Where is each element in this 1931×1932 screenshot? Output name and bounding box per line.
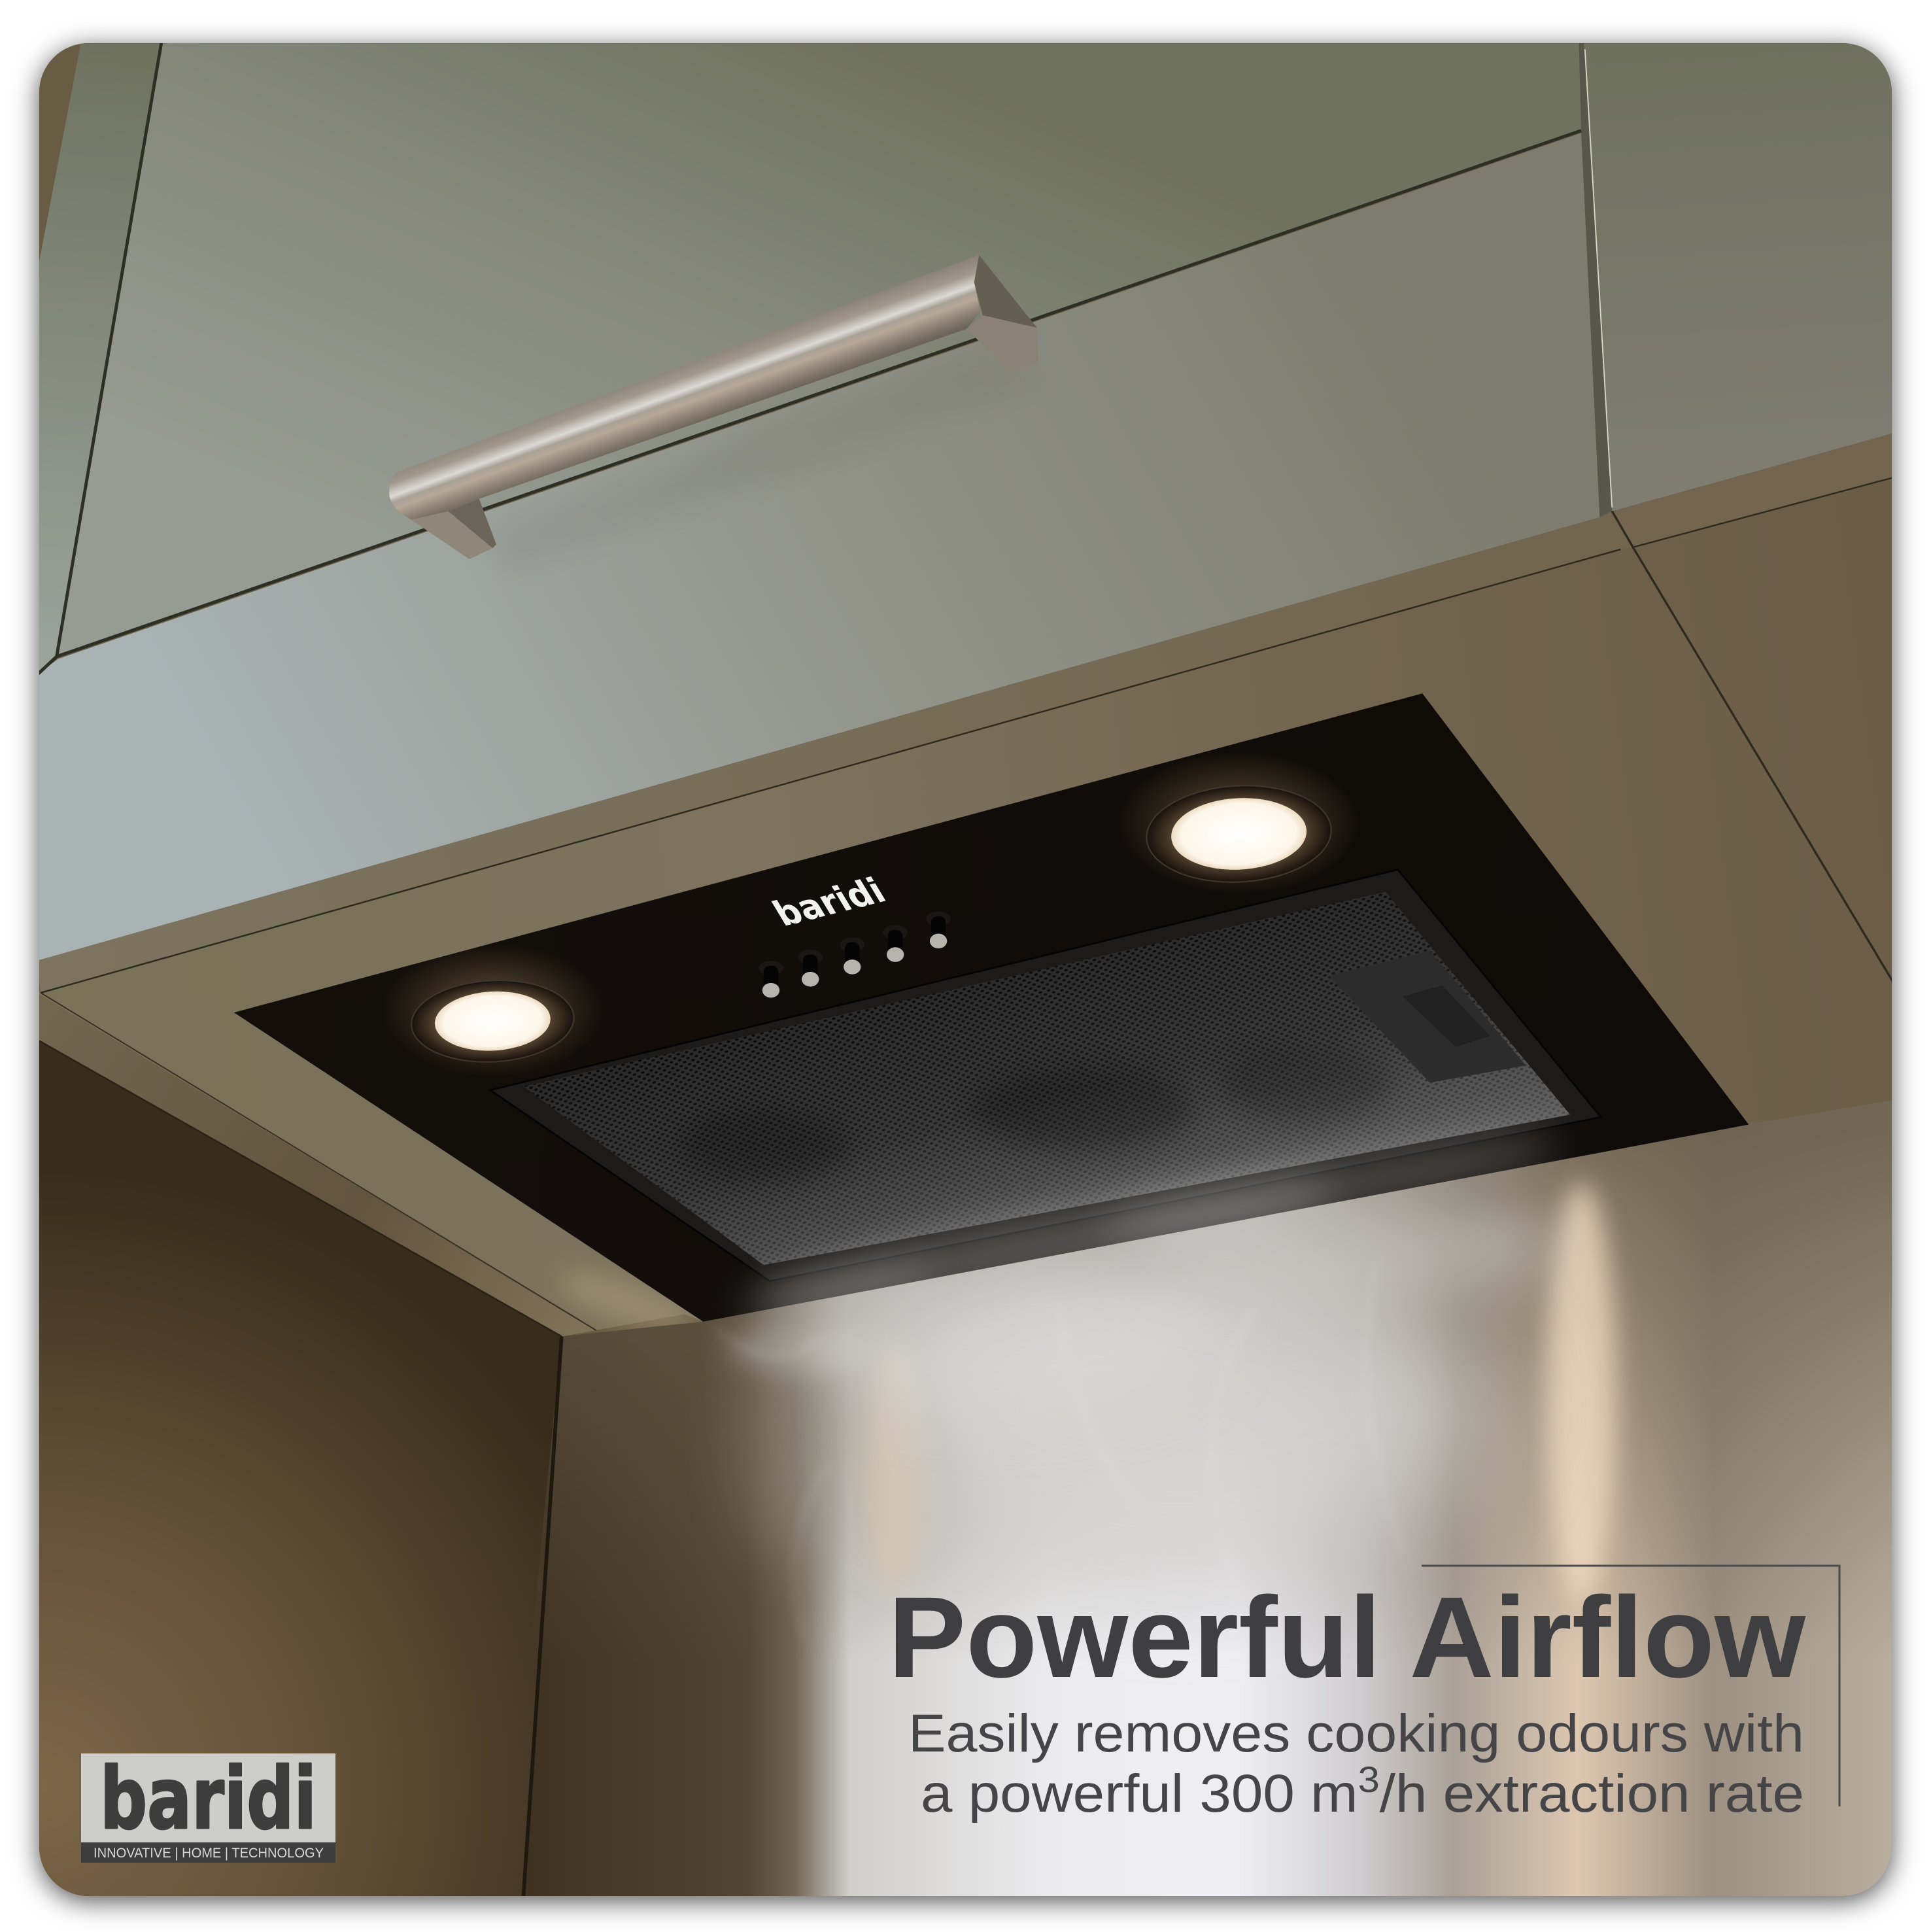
steam wisps — [714, 1256, 1404, 1638]
right cabinet door — [1582, 41, 1896, 511]
logo wordmark: baridi — [100, 1749, 316, 1848]
cabinet gap lines — [37, 43, 1581, 675]
left lamp — [382, 944, 604, 1077]
cabinet underside — [37, 477, 1896, 1336]
stainless back wall — [523, 1100, 1896, 1897]
grease filter frame — [490, 870, 1601, 1281]
left wall — [37, 1040, 562, 1897]
brand logo block — [81, 1749, 335, 1863]
side trim strip — [37, 993, 596, 1336]
left cabinet door — [37, 41, 160, 675]
handle bar — [389, 255, 980, 520]
upper cabinet door — [58, 41, 1581, 657]
control knobs — [759, 912, 951, 997]
description text: 3 — [1358, 1759, 1380, 1800]
right lamp — [1118, 751, 1359, 894]
hood brand logo: baridi — [766, 871, 893, 935]
description text — [908, 1704, 1804, 1823]
mesh shadow blotches — [677, 1047, 1392, 1182]
description text: Easily removes cooking odours with — [908, 1704, 1804, 1763]
description text: a powerful 300 m — [921, 1764, 1332, 1823]
range hood — [234, 693, 1749, 1322]
steam over hood edge — [737, 1117, 1565, 1334]
description text: /h extraction rate — [1380, 1764, 1804, 1823]
lower cabinet door — [37, 133, 1599, 961]
underside lines — [41, 477, 1896, 993]
handle left bracket — [411, 511, 492, 559]
handle soft shadow — [492, 345, 1047, 573]
cabinet handle — [389, 255, 1047, 573]
cabinet lip — [37, 511, 1634, 993]
hood faceplate — [234, 693, 1749, 1322]
steam cloud — [726, 1185, 1564, 1564]
filter latch — [1329, 951, 1526, 1082]
logo tagline: INNOVATIVE | HOME | TECHNOLOGY — [94, 1846, 324, 1861]
callout frame — [1422, 1566, 1839, 1806]
mesh filter — [523, 892, 1570, 1265]
title: Powerful Airflow — [888, 1574, 1806, 1702]
handle right bracket — [966, 315, 1038, 375]
